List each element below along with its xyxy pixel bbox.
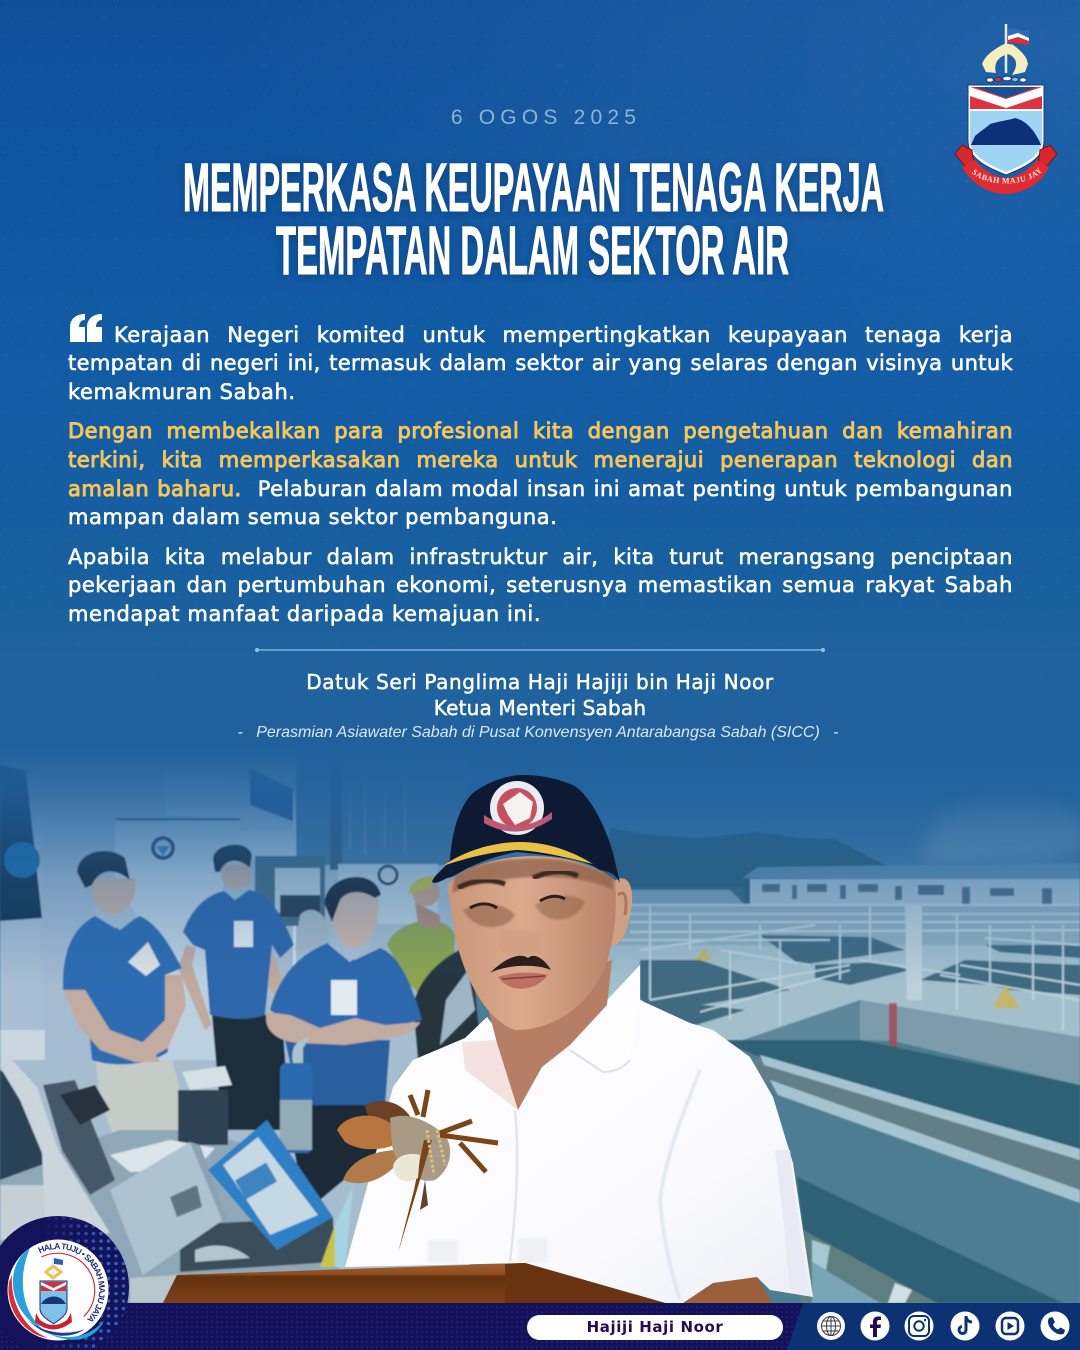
paragraph 1: tempatan di negeri ini, termasuk dalam sektor air yang selaras dengan visinya untuk bbox=[68, 351, 1013, 375]
neck bbox=[487, 960, 612, 1110]
face bbox=[447, 856, 616, 1030]
crest: Sabah state arms bbox=[954, 24, 1058, 194]
roll-up banner bbox=[115, 818, 240, 1060]
portrait: main speaker bbox=[337, 775, 813, 1303]
quote mark bbox=[70, 314, 102, 342]
name pill bbox=[527, 1315, 783, 1340]
paragraph 1 bbox=[68, 323, 1013, 404]
paragraph 1: Kerajaan Negeri komited untuk mempertingkatkan keupayaan tenaga kerja bbox=[114, 323, 1013, 347]
paragraph 2 with highlight: mampan dalam semua sektor pembanguna. bbox=[68, 505, 558, 529]
badge: Hala Tuju Sabah Maju Jaya bbox=[0, 1216, 129, 1348]
table and equipment bbox=[0, 1030, 353, 1303]
paragraph 3: pekerjaan dan pertumbuhan ekonomi, seterusnya memastikan semua rakyat Sabah bbox=[68, 573, 1013, 597]
person: man in green camouflage bbox=[387, 876, 455, 1000]
person: man in blue polo, left bbox=[63, 851, 186, 1140]
cap badge bbox=[484, 781, 552, 835]
small crest bbox=[35, 1258, 72, 1330]
flag bbox=[1008, 28, 1029, 44]
podium bbox=[163, 1263, 665, 1303]
shield bbox=[968, 85, 1044, 175]
brooch bbox=[337, 1090, 498, 1253]
divider bbox=[255, 648, 825, 652]
analyser box bbox=[110, 1142, 226, 1275]
left photo: exhibition booth bbox=[0, 748, 480, 1303]
badge: Hala Tuju Sabah Maju Jaya: HALA TUJU • SABAH MAJU JAYA bbox=[38, 1243, 105, 1322]
paragraph 3: mendapat manfaat daripada kemajuan ini. bbox=[68, 602, 541, 626]
icon: website globe bbox=[817, 1312, 845, 1340]
paragraph 3 bbox=[68, 545, 1013, 626]
arms holding pole bbox=[982, 44, 1010, 73]
title bbox=[183, 149, 884, 289]
paragraph 2 with highlight: terkini, kita memperkasakan mereka untuk menerajui penerapan teknologi dan bbox=[68, 448, 1013, 472]
date: 6 OGOS 2025 bbox=[451, 106, 641, 129]
right photo: water treatment plant bbox=[460, 748, 1080, 1303]
plant deck bbox=[600, 905, 1080, 1040]
person: man in blue polo, back bbox=[178, 844, 294, 1130]
speaker title: Ketua Menteri Sabah bbox=[434, 696, 646, 720]
shirt bbox=[345, 965, 813, 1303]
hall and doorway bbox=[296, 748, 470, 865]
person: man in dark jacket bbox=[413, 945, 480, 1075]
water bottle bbox=[280, 1037, 312, 1153]
bottom bar bbox=[0, 1303, 1080, 1350]
paragraph 2 with highlight bbox=[68, 419, 1013, 529]
torse bbox=[986, 76, 1026, 82]
icon: facebook bbox=[860, 1312, 890, 1340]
name pill text: Hajiji Haji Noor bbox=[587, 1318, 723, 1336]
forearm bbox=[600, 1277, 772, 1303]
person: man in blue polo, centre bbox=[266, 877, 422, 1200]
fade from background into photos bbox=[0, 746, 1080, 986]
dosing pump display bbox=[208, 1120, 333, 1250]
booth header bbox=[165, 765, 295, 850]
paragraph 2 with highlight: amalan baharu. Pelaburan dalam modal insan ini amat penting untuk pembangunan bbox=[68, 477, 1013, 501]
paragraph 3: Apabila kita melabur dalam infrastruktur air, kita turut merangsang penciptaan bbox=[68, 545, 1013, 569]
paragraph 1: kemakmuran Sabah. bbox=[68, 380, 296, 404]
concrete tanks bbox=[743, 1000, 860, 1060]
icon: youtube video bbox=[996, 1312, 1024, 1340]
event line: - Perasmian Asiawater Sabah di Pusat Konvensyen Antarabangsa Sabah (SICC) - bbox=[238, 724, 838, 741]
bottles on podium bbox=[428, 1238, 548, 1263]
ear bbox=[608, 878, 632, 946]
speaker name: Datuk Seri Panglima Haji Hajiji bin Haji Noor bbox=[306, 670, 774, 694]
paragraph 2 with highlight: Dengan membekalkan para profesional kita dengan pengetahuan dan kemahiran bbox=[68, 419, 1013, 443]
icon: tiktok bbox=[950, 1312, 980, 1340]
icon: instagram bbox=[904, 1312, 934, 1340]
cap bbox=[432, 775, 620, 883]
icon: phone bbox=[1040, 1312, 1070, 1340]
motto ribbon bbox=[954, 144, 1058, 194]
poster on wall bbox=[0, 765, 42, 921]
